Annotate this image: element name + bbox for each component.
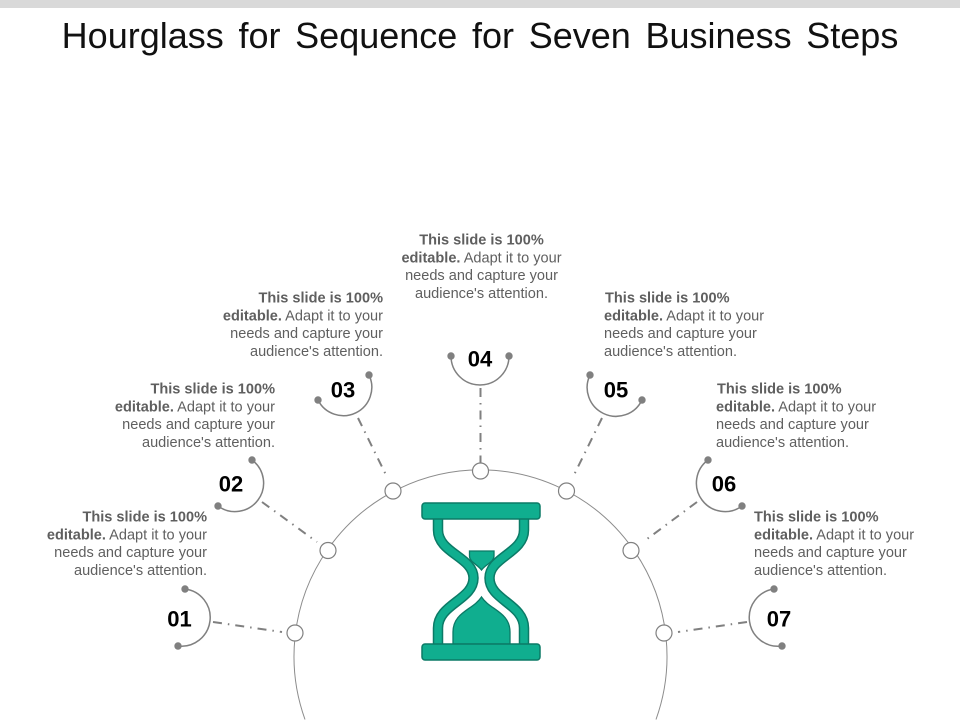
icon: hourglass xyxy=(422,503,540,660)
text block: step 05: audience's attention. xyxy=(604,344,737,360)
text block: step 02: editable. Adapt it to your xyxy=(115,400,275,416)
text block: step 04 xyxy=(401,232,562,302)
step 03 badge xyxy=(314,371,373,416)
text block: step 06 xyxy=(716,382,876,451)
text block: step 02 xyxy=(115,382,275,451)
step 05 badge: 05 xyxy=(604,378,628,402)
step 04 badge xyxy=(447,346,513,385)
text block: step 05: editable. Adapt it to your xyxy=(604,308,764,324)
connector: step 06 xyxy=(643,502,697,542)
text block: step 02: audience's attention. xyxy=(142,435,275,451)
text block: step 04: editable. Adapt it to your xyxy=(401,250,562,266)
text block: step 03: This slide is 100% xyxy=(258,290,383,306)
text block: step 04: needs and capture your xyxy=(405,268,558,284)
text block: step 07: needs and capture your xyxy=(754,545,907,561)
step 02 badge: 02 xyxy=(219,472,243,496)
ring nodes xyxy=(287,463,672,641)
text block: step 06: editable. Adapt it to your xyxy=(716,400,876,416)
connector: step 01 xyxy=(213,622,282,632)
text block: step 05: needs and capture your xyxy=(604,326,757,342)
text block: step 01: This slide is 100% xyxy=(82,510,207,526)
step 07 badge xyxy=(749,585,791,650)
text block: step 06: This slide is 100% xyxy=(717,382,842,398)
text block: step 03 xyxy=(223,290,383,360)
step 06 badge: 06 xyxy=(712,472,736,496)
text block: step 01 xyxy=(47,510,207,579)
large circle ring xyxy=(294,470,667,720)
text block: step 07: This slide is 100% xyxy=(754,510,879,526)
step 05 badge xyxy=(586,371,646,416)
title: Hourglass for Sequence for Seven Business Steps xyxy=(62,15,898,56)
text block: step 01: audience's attention. xyxy=(74,563,207,579)
text block: step 04: audience's attention. xyxy=(415,286,548,302)
text block: step 02: This slide is 100% xyxy=(150,382,275,398)
step 04 badge: 04 xyxy=(468,346,493,372)
text block: step 07: editable. Adapt it to your xyxy=(754,528,914,544)
step 07 badge: 07 xyxy=(767,606,791,632)
text block: step 03: audience's attention. xyxy=(250,344,383,360)
step 02 badge xyxy=(214,456,264,512)
step 01 badge xyxy=(167,585,210,650)
text block: step 05: This slide is 100% xyxy=(605,290,730,306)
text block: step 07: audience's attention. xyxy=(754,563,887,579)
text block: step 02: needs and capture your xyxy=(122,417,275,433)
connector: step 02 xyxy=(262,502,317,542)
text block: step 05 xyxy=(604,290,764,360)
text block: step 07 xyxy=(754,510,914,579)
text block: step 01: needs and capture your xyxy=(54,545,207,561)
text block: step 04: This slide is 100% xyxy=(419,232,544,248)
text block: step 03: needs and capture your xyxy=(230,326,383,342)
text block: step 06: audience's attention. xyxy=(716,435,849,451)
connector: step 05 xyxy=(573,418,602,477)
step 06 badge xyxy=(696,456,746,512)
step 01 badge: 01 xyxy=(167,606,192,632)
text block: step 06: needs and capture your xyxy=(716,417,869,433)
connector: step 03 xyxy=(358,418,387,477)
text block: step 01: editable. Adapt it to your xyxy=(47,528,207,544)
connector: step 04 xyxy=(480,388,482,463)
connector: step 07 xyxy=(678,622,747,632)
text block: step 03: editable. Adapt it to your xyxy=(223,308,383,324)
step 03 badge: 03 xyxy=(331,378,355,402)
